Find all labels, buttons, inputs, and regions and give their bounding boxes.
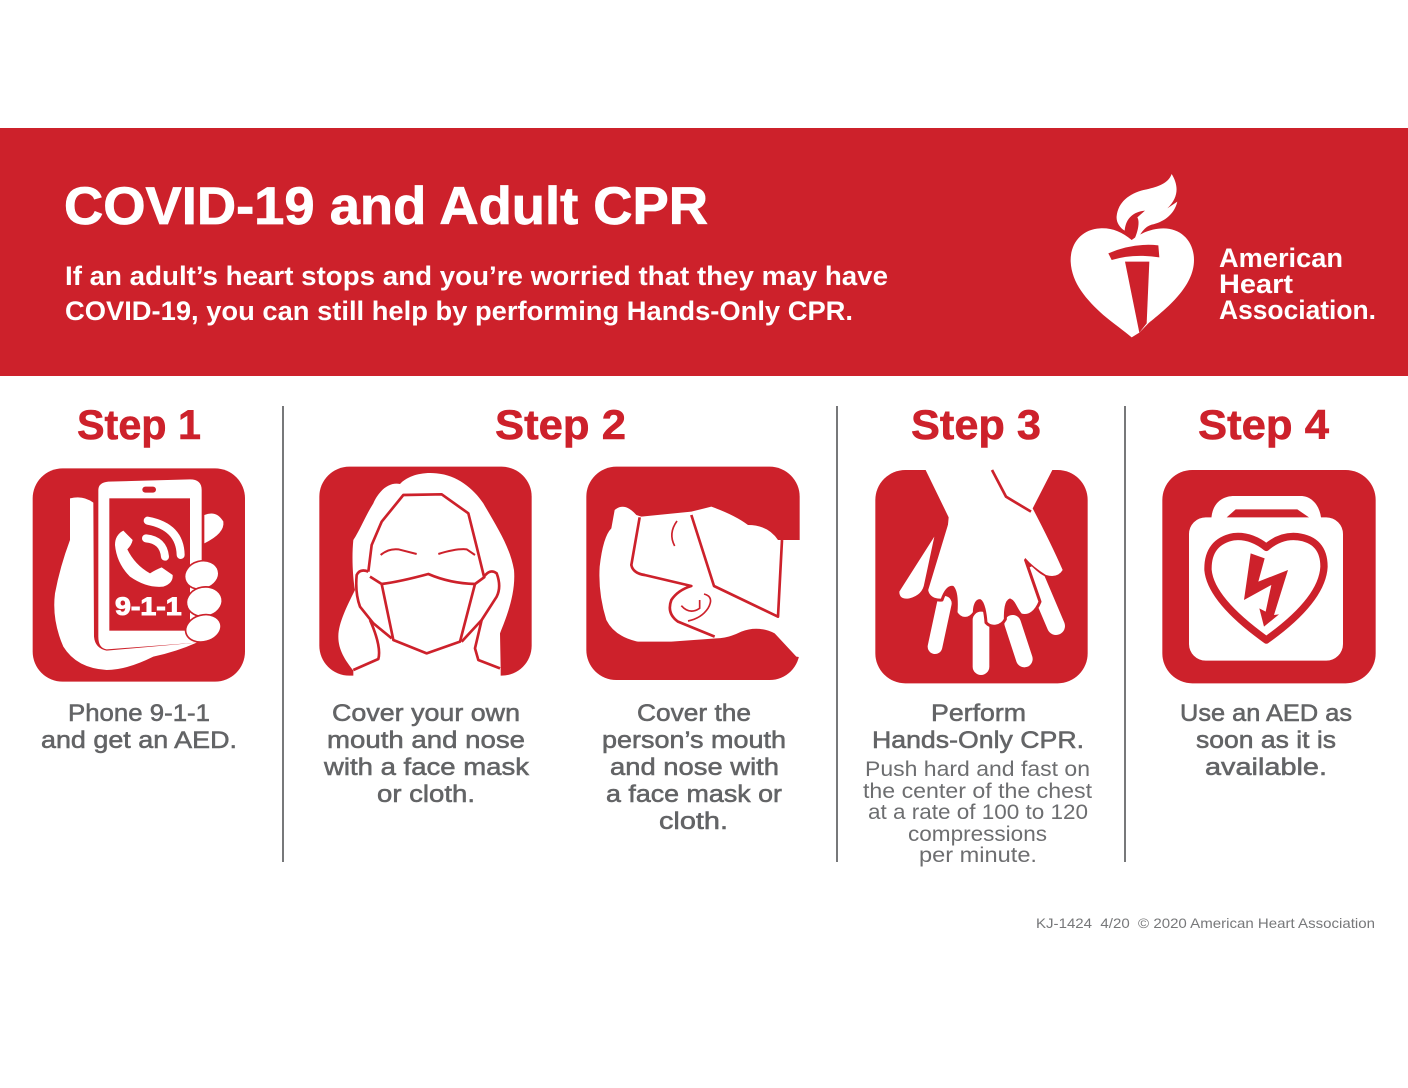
- subtitle: [65, 261, 888, 326]
- caption: cover your own mouth: or cloth.: [377, 781, 475, 808]
- caption: perform hands-only CPR: at a rate of 100 to 120: [868, 800, 1088, 824]
- caption: cover your own mouth: with a face mask: [323, 754, 530, 781]
- icon: AED device with heart and lightning bolt: [1162, 470, 1376, 683]
- caption: step 4: soon as it is: [1196, 727, 1336, 754]
- caption: step 4: Use an AED as: [1180, 700, 1352, 727]
- caption: step 4: [1180, 700, 1352, 781]
- caption: cover the person's mouth: person’s mouth: [602, 727, 786, 754]
- caption: cover the person's mouth: Cover the: [637, 700, 751, 727]
- icon: person wearing a face mask: [319, 467, 532, 680]
- icon: hand holding phone dialing 9-1-1: 9-1-1: [115, 593, 182, 621]
- panel: step 2: [319, 401, 801, 835]
- icon: hand holding phone dialing 9-1-1: [33, 468, 245, 682]
- caption: perform hands-only CPR: Perform: [931, 700, 1026, 727]
- header banner: [0, 128, 1408, 376]
- heading: step 2: Step 2: [495, 401, 626, 448]
- caption: step 1: and get an AED.: [41, 727, 237, 754]
- caption: cover the person's mouth: cloth.: [659, 808, 728, 835]
- footer copyright: KJ-1424 4/20 © 2020 American Heart Association: [1036, 915, 1375, 931]
- panel: step 3: [863, 401, 1092, 867]
- caption: perform hands-only CPR: compressions: [908, 822, 1047, 846]
- logo wordmark: American: [1219, 243, 1343, 273]
- logo wordmark: [1219, 243, 1376, 325]
- heading: step 1: Step 1: [77, 401, 201, 448]
- panel: step 4: [1162, 401, 1376, 781]
- caption: cover your own mouth: mouth and nose: [327, 727, 525, 754]
- heading: step 4: Step 4: [1198, 401, 1330, 448]
- caption: cover your own mouth: Cover your own: [332, 700, 520, 727]
- caption: step 1: Phone 9-1-1: [68, 700, 210, 727]
- subtitle: If an adult’s heart stops and you’re worried that they may have: [65, 261, 888, 291]
- subtitle: COVID-19, you can still help by performing Hands-Only CPR.: [65, 296, 853, 326]
- caption: perform hands-only CPR: [863, 700, 1092, 867]
- caption: cover the person's mouth: [602, 700, 786, 835]
- icon: hands performing chest compressions: [875, 469, 1088, 683]
- caption: perform hands-only CPR: per minute.: [919, 843, 1037, 867]
- icon: covering the person's mouth with a cloth: [586, 467, 801, 680]
- icon: American Heart Association heart and torch logo: [1071, 174, 1194, 337]
- caption: cover the person's mouth: and nose with: [610, 754, 779, 781]
- caption: step 4: available.: [1205, 754, 1327, 781]
- title: COVID-19 and Adult CPR: [64, 177, 708, 236]
- heading: step 3: Step 3: [911, 401, 1041, 448]
- caption: cover your own mouth: [323, 700, 530, 808]
- caption: perform hands-only CPR: the center of the chest: [863, 779, 1092, 803]
- caption: perform hands-only CPR: Push hard and fast on: [865, 757, 1090, 781]
- caption: step 1: [41, 700, 237, 754]
- caption: cover the person's mouth: a face mask or: [606, 781, 782, 808]
- caption: perform hands-only CPR: Hands-Only CPR.: [872, 727, 1084, 754]
- logo wordmark: Heart: [1219, 269, 1293, 299]
- logo wordmark: Association.: [1219, 295, 1376, 325]
- panel: step 1: [33, 401, 245, 754]
